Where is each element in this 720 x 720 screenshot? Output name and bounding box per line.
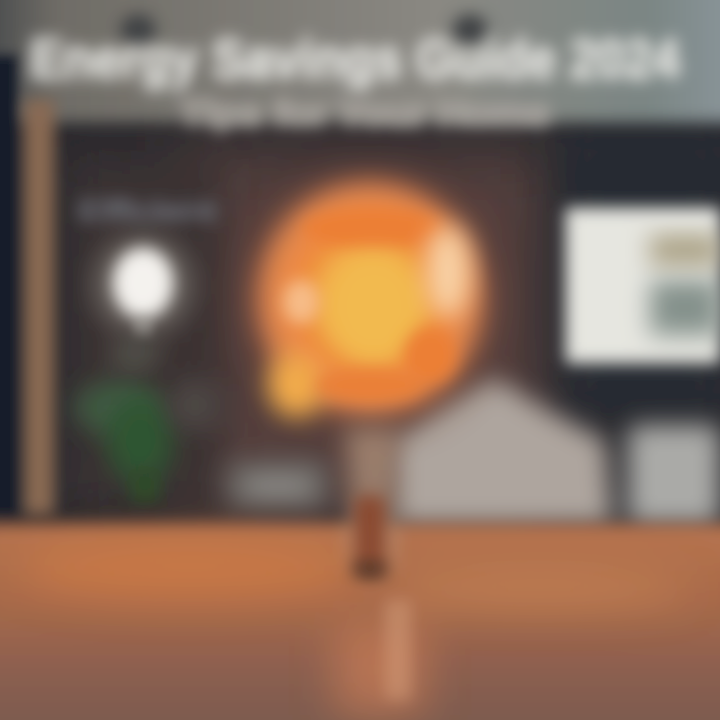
floor: [0, 524, 720, 720]
lamp stem: [345, 428, 411, 700]
white framed picture: [566, 208, 720, 363]
wooden post: [24, 100, 54, 515]
left navy column: [0, 55, 18, 515]
glowing orange sun orb: [220, 150, 520, 450]
ceiling spotlights: [120, 14, 488, 46]
floor glow: [20, 540, 690, 715]
icon: white light bulb: [91, 233, 195, 337]
ceiling band: [0, 0, 720, 122]
potted plant: [74, 341, 221, 502]
subtitle: Tips for Your Home: [180, 94, 550, 132]
sofa: [225, 378, 720, 525]
small wall caption: Efficient: [78, 195, 216, 226]
